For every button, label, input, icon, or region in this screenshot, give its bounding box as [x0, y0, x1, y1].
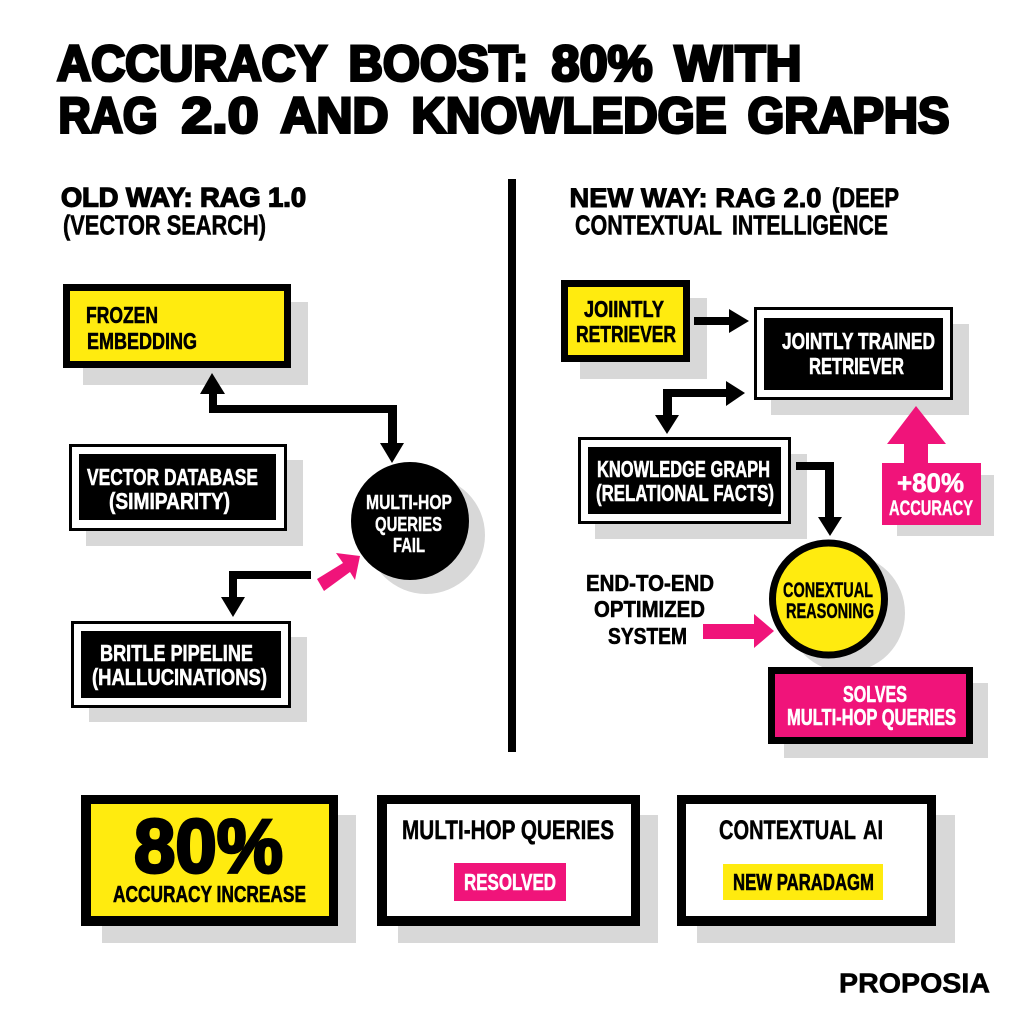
- title: AND: [280, 88, 388, 144]
- panel: solves multi-hop queries: MULTI-HOP QUERIES: [787, 704, 956, 730]
- panel: jointly trained retriever: JOINTLY TRAINED: [782, 328, 935, 354]
- arrow: pink into circle: [317, 553, 360, 591]
- panel: frozen embedding: FROZEN: [86, 302, 158, 328]
- arrow: down to brittle pipeline: [221, 571, 311, 617]
- heading: new way: CONTEXTUAL: [575, 210, 722, 240]
- panel: knowledge graph: [578, 437, 807, 539]
- panel: jointly retriever: JOIINTLY: [584, 296, 664, 322]
- panel: brittle pipeline: [71, 621, 307, 722]
- heading: old way: OLD WAY: RAG 1.0: [61, 182, 306, 212]
- heading: new way: (DEEP: [832, 183, 899, 213]
- heading: new way: INTELLIGENCE: [732, 210, 888, 240]
- panel: jointly trained retriever: [754, 307, 969, 415]
- title: RAG: [58, 88, 158, 144]
- arrow: frozen embedding to multi-hop circle: [200, 373, 404, 463]
- text: end-to-end optimized system: SYSTEM: [608, 623, 687, 649]
- panel: knowledge graph: KNOWLEDGE GRAPH: [597, 456, 770, 482]
- panel: +80% accuracy: [882, 463, 994, 536]
- heading: old way: [61, 182, 306, 240]
- circle: contextual reasoning: CONEXTUAL: [783, 579, 873, 602]
- panel: brittle pipeline: (HALLUCINATIONS): [92, 664, 267, 690]
- brand: proposia: PROPOSIA: [839, 968, 990, 999]
- title: WITH: [674, 36, 802, 92]
- title: [57, 36, 950, 144]
- arrow: pink into contextual reasoning: [703, 614, 774, 648]
- stat card: multi-hop queries resolved: RESOLVED: [464, 869, 556, 895]
- title: KNOWLEDGE: [412, 88, 726, 144]
- text: end-to-end optimized system: [586, 570, 714, 649]
- panel: jointly retriever: RETRIEVER: [576, 321, 676, 347]
- panel: frozen embedding: EMBEDDING: [87, 328, 197, 354]
- heading: old way: (VECTOR SEARCH): [63, 210, 266, 240]
- panel: +80% accuracy: +80%: [897, 468, 964, 498]
- panel: knowledge graph: (RELATIONAL FACTS): [596, 480, 774, 506]
- circle: multi-hop queries fail: FAIL: [393, 535, 425, 557]
- title: BOOST:: [348, 36, 528, 92]
- title: ACCURACY: [57, 36, 327, 92]
- panel: solves multi-hop queries: [768, 667, 988, 758]
- panel: vector database: (SIMIPARITY): [109, 488, 230, 514]
- stat card: 80% accuracy increase: [81, 795, 356, 943]
- text: end-to-end optimized system: OPTIMIZED: [594, 596, 705, 622]
- stat card: 80% accuracy increase: 80%: [134, 804, 283, 890]
- panel: jointly retriever: [561, 280, 707, 379]
- arrow: jointly retriever to trained retriever: [694, 309, 749, 333]
- panel: solves multi-hop queries: SOLVES: [843, 681, 907, 707]
- panel: jointly trained retriever: RETRIEVER: [809, 353, 904, 379]
- heading: new way: NEW WAY: RAG 2.0: [570, 183, 822, 213]
- stat card: contextual ai new paradigm: [677, 795, 955, 943]
- title: 2.0: [182, 88, 258, 144]
- circle: contextual reasoning: REASONING: [786, 600, 874, 623]
- arrow: knowledge graph to contextual reasoning: [796, 462, 842, 536]
- panel: vector database: VECTOR DATABASE: [87, 464, 258, 490]
- centre divider: [508, 179, 516, 752]
- circle: multi-hop queries fail: QUERIES: [375, 514, 442, 536]
- stat card: multi-hop queries resolved: MULTI-HOP QUERIES: [402, 815, 614, 845]
- title: GRAPHS: [748, 88, 950, 144]
- title: 80%: [552, 36, 652, 92]
- panel: brittle pipeline: BRITLE PIPELINE: [100, 640, 253, 666]
- stat card: multi-hop queries resolved: [377, 795, 658, 943]
- stat card: contextual ai new paradigm: NEW PARADAGM: [733, 869, 874, 895]
- arrow: two-way between retriever and knowledge graph: [655, 381, 745, 434]
- panel: frozen embedding: [63, 284, 308, 385]
- panel: vector database: [69, 444, 303, 546]
- panel: +80% accuracy: ACCURACY: [889, 497, 973, 520]
- stat card: 80% accuracy increase: ACCURACY INCREASE: [113, 881, 306, 907]
- text: end-to-end optimized system: END-TO-END: [586, 570, 714, 596]
- circle: multi-hop queries fail: MULTI-HOP: [366, 492, 452, 514]
- circle: contextual reasoning: [772, 543, 905, 672]
- stat card: contextual ai new paradigm: CONTEXTUAL: [719, 815, 856, 845]
- arrow: pink up to retriever: [887, 406, 946, 470]
- heading: new way: [570, 183, 899, 240]
- stat card: contextual ai new paradigm: AI: [863, 815, 883, 845]
- circle: multi-hop queries fail: [351, 462, 485, 594]
